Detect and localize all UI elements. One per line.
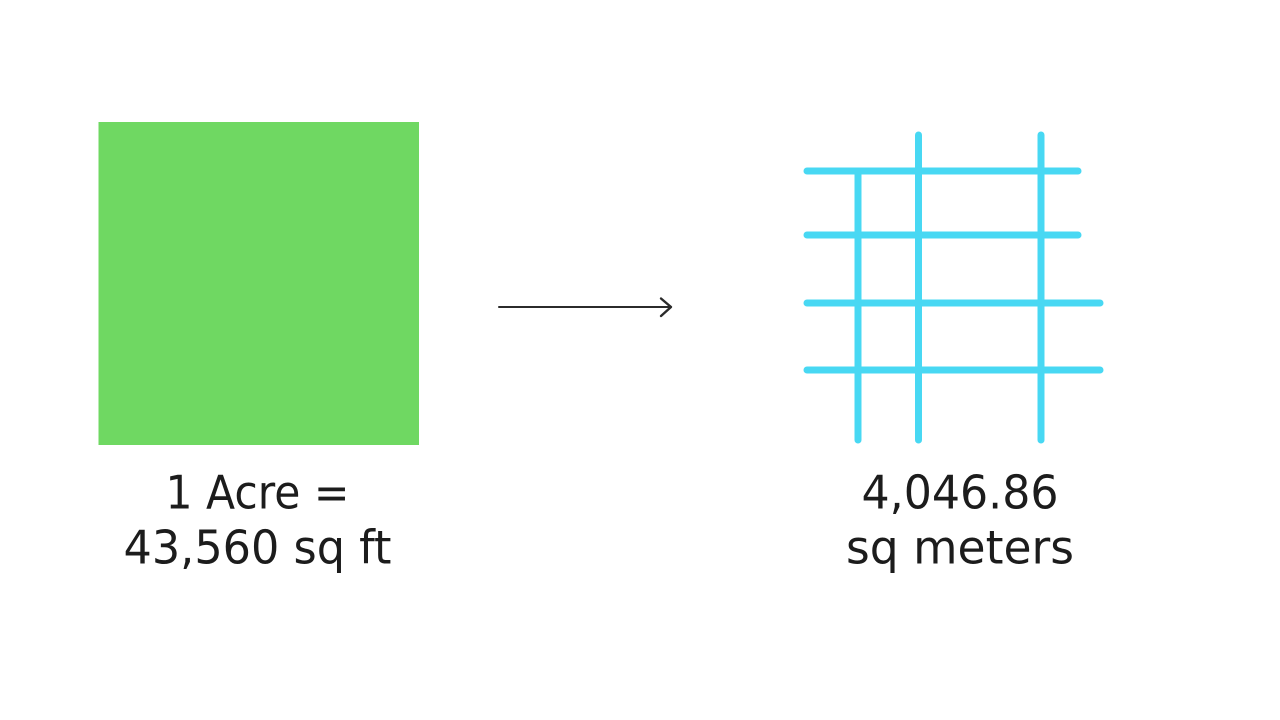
arrow [499,298,671,316]
square meters label: sq meters [846,520,1074,574]
square meters label [846,466,1074,574]
acre label: 43,560 sq ft [124,520,392,574]
acre label [124,466,392,574]
blue grid [807,135,1100,440]
green acre square [98,122,419,445]
acre label: 1 Acre = [166,466,350,520]
square meters label: 4,046.86 [862,466,1058,520]
